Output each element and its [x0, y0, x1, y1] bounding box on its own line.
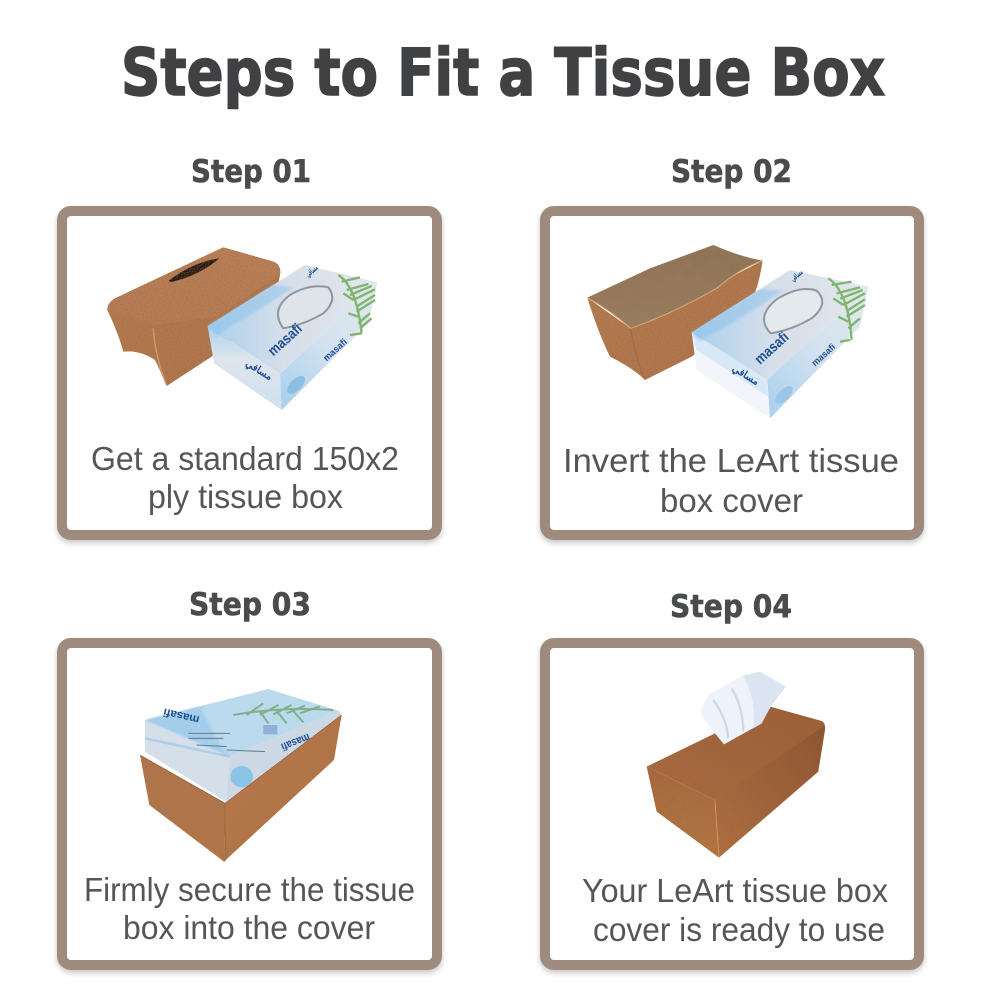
- leather cover: [107, 247, 280, 386]
- tissue box: مسافي: [304, 263, 320, 280]
- tissue box: masafi: [265, 321, 306, 360]
- step 01 card frame: [62, 211, 437, 535]
- step 01 caption: [91, 440, 399, 515]
- step 03 caption: [84, 871, 415, 946]
- step 03 caption: Firmly secure the tissue: [84, 871, 415, 908]
- tissue box: [692, 268, 868, 418]
- finished cover: [647, 707, 825, 858]
- step 02 caption: box cover: [660, 482, 803, 519]
- tissue box: masafi: [752, 329, 792, 368]
- tissue box: مسافي: [730, 363, 761, 388]
- step 02 card frame: [545, 211, 919, 535]
- tissue box in cover: [145, 689, 342, 802]
- illustration: closed cover beside tissue box: [107, 247, 377, 410]
- panel: step 02: [545, 154, 919, 535]
- panel: step 04: [545, 589, 919, 965]
- tissue box: مسافي: [243, 358, 274, 383]
- tissue box: [208, 263, 377, 410]
- step 02 heading: Step 02: [671, 154, 792, 190]
- step 02 caption: [563, 442, 899, 519]
- tissue box: مسافي: [789, 268, 805, 284]
- tissue box: masafi: [810, 342, 837, 368]
- step 01 caption: ply tissue box: [148, 478, 343, 515]
- step 01 heading: Step 01: [191, 154, 311, 190]
- illustration: tissue box seated in cover: [140, 689, 342, 862]
- step 03 card frame: [62, 643, 437, 965]
- panel: step 01: [62, 154, 437, 535]
- step 04 caption: [582, 872, 888, 948]
- step 04 heading: Step 04: [670, 589, 792, 625]
- step 03 caption: box into the cover: [123, 909, 375, 946]
- tissue box in cover: masafi: [279, 731, 312, 752]
- illustration: finished cover with tissue: [647, 672, 825, 858]
- tissue box in cover: masafi: [162, 705, 201, 725]
- step 01 caption: Get a standard 150x2: [91, 440, 399, 477]
- illustration: inverted cover beside tissue box: [587, 245, 868, 418]
- step 04 card frame: [545, 643, 919, 965]
- tissue: [701, 672, 786, 744]
- step 02 caption: Invert the LeArt tissue: [563, 442, 899, 479]
- step 04 caption: cover is ready to use: [593, 911, 885, 948]
- tissue box: masafi: [321, 337, 349, 363]
- panel: step 03: [62, 587, 437, 965]
- brown cover base: [140, 715, 342, 862]
- step 03 heading: Step 03: [189, 587, 311, 623]
- step 04 caption: Your LeArt tissue box: [582, 872, 888, 909]
- inverted leather cover: [587, 245, 763, 380]
